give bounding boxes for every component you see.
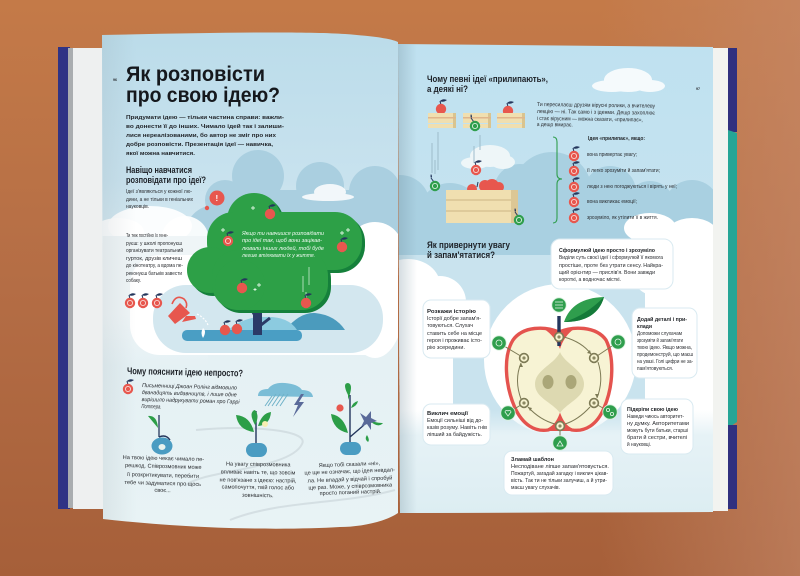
- card: tell a story: героя і проживає істо-: [427, 338, 482, 344]
- stem and leaf: [557, 316, 561, 346]
- paragraph: viral videos: а дещо вмирає.: [537, 122, 573, 129]
- page numbers: 97: [696, 87, 700, 91]
- thought bubble: [205, 190, 224, 210]
- text: obstacles: решкод. Співрозмовник може: [125, 463, 202, 471]
- page numbers: [113, 78, 700, 91]
- card: formulate simply: простіше, проте без утрати сенсу. Найкра-: [559, 262, 663, 269]
- card: break the pattern: [504, 451, 613, 495]
- card: tell a story: Історії добре запам'я-: [427, 316, 481, 322]
- list: sticky idea: вона привертає увагу;: [587, 152, 637, 158]
- title: про свою ідею?: [126, 83, 280, 107]
- card: support your idea: Наведи чиюсь авторитет-: [627, 414, 684, 420]
- cycle arrows: [499, 337, 618, 443]
- tree text: [241, 231, 325, 259]
- text: you generate ideas: гурток, друзів кличеш: [126, 256, 182, 262]
- storm cloud and rain: [258, 383, 313, 417]
- falling lines: [432, 132, 480, 174]
- paragraph: viral videos: Ти пересилаєш друзям вірусні ролики, а вчителеву: [537, 102, 655, 110]
- text: you generate ideas: [126, 232, 183, 284]
- paragraph: viral videos: [537, 102, 655, 130]
- card: tell a story: [423, 300, 490, 358]
- card: break the pattern: Зламай шаблон: [511, 456, 554, 463]
- card: support your idea: [621, 399, 693, 454]
- pale cloud below tree: [153, 285, 383, 353]
- text: rejected: [304, 460, 396, 498]
- text: obstacles: своє...: [154, 488, 171, 494]
- card: evoke emotions: казів розуму. Навіть гнів: [427, 425, 487, 431]
- card: add details: [632, 308, 697, 378]
- text: you generate ideas: собаку.: [126, 278, 141, 284]
- plant 2: [236, 410, 271, 457]
- card: add details: зрозуміти й запам'ятати: [637, 337, 683, 344]
- text: attention: зовнішність.: [242, 493, 274, 499]
- text: obstacles: тебе чи задуматися про щось: [124, 480, 201, 488]
- list: sticky idea: її легко зрозуміти й запам'ятати;: [586, 167, 660, 174]
- card: tell a story: Розкажи історію: [427, 309, 476, 315]
- intro paragraph: лися нереалізованими, бо автор не зміг про них: [126, 132, 277, 139]
- J. K. Rowling note: Письменниці Джоан Ролінг відмовило: [142, 383, 237, 391]
- card: add details: Допоможи слухачам: [637, 331, 682, 337]
- green icons: [492, 298, 625, 450]
- page numbers: 96: [113, 78, 117, 82]
- card: tell a story: рію зсередини.: [427, 345, 465, 351]
- text: obstacles: На твою ідею чекає чимало пе-: [123, 455, 204, 463]
- top white cloud: [592, 68, 665, 92]
- text: you generate ideas: Ти теж постійно їх гене-: [126, 232, 168, 239]
- card: break the pattern: Несподіване ліпше запам'ятовується.: [511, 464, 609, 470]
- J. K. Rowling note: [123, 379, 241, 413]
- card: support your idea: можуть бути батьки, старші: [627, 428, 688, 434]
- J. K. Rowling note: вирішило надрукувати роман про Гаррі: [142, 397, 240, 406]
- intro paragraph: добре розповісти. Презентація ідеї — навичка,: [126, 141, 273, 148]
- tree text: про ідеї так, щоб вони зацікав-: [242, 238, 322, 244]
- list: sticky idea: Ідея «прилипає», якщо:: [588, 136, 645, 142]
- text: you generate ideas: руєш: у школі пропонуєш: [126, 241, 182, 247]
- card: break the pattern: маєш увагу слухачів.: [511, 485, 560, 491]
- heading: why ideas stick: [427, 74, 548, 95]
- card: add details: клади: [637, 324, 653, 330]
- heading: why ideas stick: Чому певні ідеї «прилипають»,: [427, 74, 548, 85]
- text: attention: не пов'язане з ідеєю: настрій,: [220, 476, 297, 485]
- icons: three small apples: [125, 293, 163, 308]
- pale blue sky behind the apple: [398, 255, 645, 417]
- card: formulate simply: [551, 239, 673, 289]
- small white cloud behind crate: [461, 145, 515, 169]
- tree text: Якщо ти навчишся розповідати: [241, 231, 325, 237]
- J. K. Rowling note: дванадцять видавництв, і лише одне: [142, 390, 237, 398]
- card: formulate simply: Сформулюй ідею просто і зрозуміло: [559, 247, 656, 254]
- small white cloud: [302, 184, 354, 201]
- card: break the pattern: Пожартуй, загадай загадку і виклич цікав-: [511, 470, 608, 477]
- intro paragraph: якої можна навчитися.: [126, 151, 195, 157]
- text: rejected: це ще не означає, що ідея невдал-: [304, 467, 395, 477]
- card: formulate simply: щий орієнтир — прислів'я. Вони завжди: [559, 269, 655, 276]
- card: add details: на увазі. Голі цифри не за-: [637, 359, 693, 365]
- heading: why learn: розповідати про ідеї?: [126, 175, 206, 186]
- text: rejected: просто поганий настрій.: [319, 488, 382, 497]
- book cover edge and page blocks: [58, 47, 737, 511]
- heading: why ideas stick: а деякі ні?: [427, 84, 468, 95]
- text: ideas everywhere: Ідеї з'являються у кожної лю-: [126, 189, 192, 195]
- list: sticky idea: вона викликає емоції;: [587, 199, 637, 205]
- heading: how to attract attention: Як привернути увагу: [427, 240, 511, 251]
- list: sticky idea: [569, 136, 677, 223]
- paragraph: viral videos: лекцію — ні. Так само і з ідеями. Дещо захоплює: [537, 109, 655, 117]
- text: obstacles: [122, 455, 204, 495]
- heading: how to attract attention: й запам'ятатися?: [427, 250, 495, 261]
- title: Як розповісти: [126, 62, 265, 86]
- heading: why hard: Чому пояснити ідею непросто?: [127, 366, 243, 379]
- thought bubble: !: [216, 194, 218, 203]
- card: support your idea: брати й сестри, вчителі: [627, 434, 687, 441]
- text: obstacles: її розкритикувати, перебити: [126, 472, 199, 480]
- card: formulate simply: Виділи суть своєї ідеї і сформулюй її якомога: [559, 254, 664, 261]
- card: break the pattern: вість. Так ти не тільки залучиш, а й утри-: [511, 477, 607, 484]
- white cloud mass lower page: [398, 213, 713, 435]
- text: rejected: ще раз. Може, у співрозмовника: [308, 483, 393, 491]
- card: evoke emotions: ліпший за байдужість.: [427, 431, 482, 438]
- three crates: [428, 99, 525, 131]
- text: attention: На увагу співрозмовника: [226, 462, 291, 468]
- card: formulate simply: короткі, а водночас місткі.: [559, 277, 621, 283]
- card: add details: пам'ятовуються.: [637, 366, 673, 372]
- bracket: [553, 137, 562, 223]
- text: you generate ideas: організувати театральний: [126, 247, 183, 254]
- J. K. Rowling note: Поттера.: [141, 404, 161, 411]
- intro paragraph: во донести її до інших. Чимало ідей так і залиши-: [126, 123, 284, 130]
- tree text: лювали інших людей, тобі буде: [241, 245, 325, 252]
- card: add details: твою ідею. Якщо можна,: [637, 345, 692, 351]
- text: attention: самопочуття, твій голос або: [222, 483, 294, 492]
- card: support your idea: й науковці.: [627, 441, 651, 448]
- card: tell a story: товуються. Слухач: [427, 323, 473, 329]
- heading: why learn: [126, 165, 206, 186]
- text: you generate ideas: реконуєш батьків завести: [126, 271, 182, 277]
- text: ideas everywhere: [126, 189, 193, 210]
- intro paragraph: Придумати ідею — тільки частина справи: важли-: [126, 115, 284, 121]
- tree text: легше втілювати їх у життя.: [241, 253, 315, 259]
- white clouds around tree: [102, 206, 398, 358]
- card: tell a story: ставить себе на місце: [427, 331, 482, 337]
- faint show-through lines: [185, 428, 395, 520]
- list: sticky idea: люди з нею погоджуються і вірять у неї;: [587, 184, 677, 190]
- card: evoke emotions: [423, 404, 490, 445]
- card: support your idea: ну думку. Авторитетами: [627, 421, 689, 427]
- card: evoke emotions: Емоції сильніші від до-: [427, 418, 483, 424]
- text: attention: впливає навіть те, що зовсім: [221, 469, 296, 477]
- text: you generate ideas: до кінотеатру, а вдома пе-: [126, 263, 183, 269]
- paragraph: viral videos: і стає вірусним — можна сказати, «прилипає»,: [537, 116, 643, 123]
- intro paragraph: [126, 115, 284, 157]
- plant 3: [331, 383, 383, 455]
- falling apples: [430, 160, 482, 191]
- heading: how to attract attention: [427, 240, 511, 261]
- text: rejected: ла. Не впадай у відчай і спробуй: [308, 475, 392, 484]
- mid-blue clouds: [191, 150, 398, 234]
- text: rejected: Якщо тобі сказали «ні»,: [319, 461, 381, 469]
- text: attention: [219, 461, 297, 500]
- heading: why learn: Навіщо навчатися: [126, 165, 192, 176]
- tree: [187, 193, 365, 338]
- left page: [92, 30, 405, 530]
- apple diagram: [492, 297, 625, 450]
- card: evoke emotions: Виклич емоції: [427, 411, 468, 417]
- list: sticky idea: зрозуміло, як утілити її в життя.: [587, 215, 658, 221]
- card: add details: Додай деталі і при-: [637, 316, 687, 323]
- title: [126, 62, 280, 107]
- plant 1: [148, 415, 172, 454]
- large crate: [446, 179, 524, 225]
- card: add details: продемонструй, що маєш: [637, 351, 693, 358]
- text: ideas everywhere: науковців.: [126, 204, 149, 210]
- mid-blue cloud band: [398, 152, 713, 265]
- ground and hills: [182, 313, 345, 341]
- right page: [398, 44, 713, 513]
- icon: watering can: [168, 297, 208, 325]
- card: support your idea: Підкріпи свою ідею: [627, 407, 678, 413]
- text: ideas everywhere: дини, а не тільки в геніальних: [126, 197, 193, 203]
